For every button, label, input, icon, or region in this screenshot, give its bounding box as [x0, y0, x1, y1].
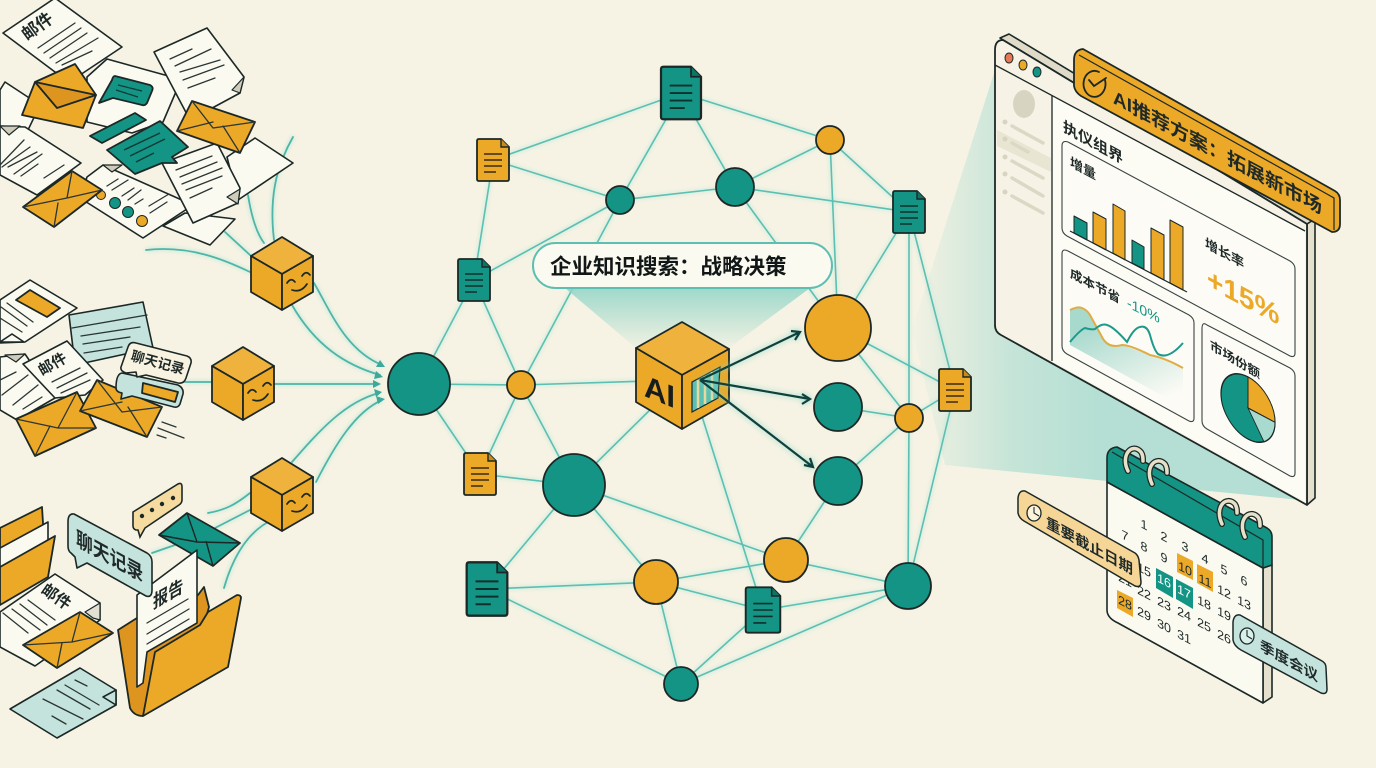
network nodes — [388, 126, 931, 701]
date numbers: 13 — [1237, 592, 1251, 613]
date numbers — [1118, 516, 1251, 647]
date numbers: 3 — [1182, 538, 1188, 556]
report paper: 报告 — [153, 575, 183, 613]
callout: search query: 企业知识搜索：战略决策 — [550, 255, 787, 279]
AI cube: AI — [644, 368, 675, 415]
date numbers: 9 — [1161, 549, 1167, 567]
label: important deadline — [1018, 491, 1141, 586]
middle-left document cluster — [0, 280, 191, 456]
label: quarterly meeting — [1233, 615, 1327, 694]
paper with title: mail — [0, 574, 100, 666]
paper: lines — [0, 354, 55, 420]
label: quarterly meeting: 季度会议 — [1260, 636, 1318, 686]
date numbers: 21 — [1118, 569, 1132, 590]
paper with title: mail: 邮件 — [36, 350, 70, 379]
date numbers: 1 — [1141, 516, 1147, 534]
icon: clock — [1027, 505, 1041, 521]
calendar body — [1107, 482, 1272, 703]
panel: cost savings: -10% — [1127, 296, 1160, 327]
calendar header — [1107, 447, 1272, 568]
paper with title: mail: 邮件 — [38, 581, 74, 614]
chat record label: 聊天记录 — [76, 527, 143, 587]
teal envelope — [159, 513, 240, 566]
icon: check — [1083, 71, 1106, 97]
knowledge network edges — [419, 93, 955, 684]
left folder — [0, 507, 55, 605]
label: important deadline: 重要截止日期 — [1046, 514, 1133, 579]
beam: AI to dashboard — [912, 70, 1300, 500]
dashboard window — [995, 34, 1315, 505]
flow arrowheads into main node — [373, 360, 385, 404]
panel: cost savings: 成本节省 — [1070, 265, 1120, 306]
sidebar — [997, 90, 1051, 213]
top-left document cluster — [0, 0, 293, 245]
date numbers: 8 — [1141, 538, 1147, 556]
panel: growth: 增长率 — [1205, 235, 1244, 271]
banner: AI recommendation: AI推荐方案：拓展新市场 — [1113, 85, 1322, 219]
panel: growth: +15% — [1207, 263, 1279, 332]
orange envelope 1 — [22, 64, 96, 128]
list paper with dots — [80, 165, 193, 238]
date numbers: 25 — [1197, 614, 1211, 635]
date numbers: 26 — [1217, 626, 1231, 647]
left paper — [0, 126, 81, 195]
paper right — [154, 28, 244, 120]
date numbers: 2 — [1161, 528, 1167, 546]
chat record bubble — [121, 342, 191, 383]
AI cube — [636, 322, 729, 429]
panel: growth — [1062, 142, 1295, 357]
date numbers: 30 — [1157, 615, 1171, 636]
window frame — [995, 34, 1315, 505]
date numbers: 19 — [1217, 603, 1231, 624]
calendar — [1107, 447, 1272, 703]
arrows from AI cube to results — [700, 331, 813, 467]
paper with title: mail — [23, 341, 103, 398]
motion dashes — [157, 422, 184, 438]
date numbers: 4 — [1202, 550, 1209, 568]
date numbers: 15 — [1137, 559, 1151, 580]
chat record label — [68, 514, 152, 596]
date numbers: 11 — [1199, 570, 1211, 591]
date numbers: 5 — [1221, 561, 1227, 579]
date numbers: 18 — [1197, 592, 1211, 613]
date numbers: 16 — [1157, 570, 1171, 591]
callout: search query — [533, 243, 832, 288]
orange envelope — [23, 612, 113, 668]
paper with title: mail: 邮件 — [18, 9, 57, 44]
orange envelope 2 — [177, 101, 255, 153]
dashboard title: 执仪组界 — [1063, 117, 1123, 168]
cube: middle source — [212, 347, 274, 420]
date numbers: 6 — [1241, 572, 1247, 590]
teal paper — [10, 668, 116, 738]
data flow curves into cubes — [146, 137, 382, 588]
date numbers: 12 — [1217, 581, 1231, 602]
report paper — [137, 550, 197, 687]
teal card — [69, 302, 153, 365]
panel: cost savings — [1062, 250, 1194, 422]
network document icons — [458, 67, 971, 633]
icon: clock — [1240, 628, 1254, 644]
date numbers: 22 — [1137, 582, 1151, 603]
panel: market share — [1202, 324, 1295, 477]
dotted speech bubble — [133, 483, 182, 537]
date numbers: 28 — [1118, 592, 1132, 613]
line chart — [1070, 307, 1183, 407]
chat record bubble: 聊天记录 — [129, 348, 186, 377]
date highlights — [1117, 553, 1213, 617]
teal chat bubbles — [90, 76, 188, 174]
date numbers: 17 — [1177, 581, 1191, 602]
orange envelope 3 — [23, 171, 102, 227]
date numbers: 23 — [1157, 593, 1171, 614]
orange envelopes — [16, 380, 162, 456]
teal bubble with orange bar — [116, 373, 183, 407]
panel: growth: 增量 — [1070, 154, 1096, 183]
AI cube window — [692, 367, 720, 412]
date numbers: 7 — [1122, 527, 1128, 545]
cube: top source — [251, 237, 313, 310]
bar chart — [1070, 204, 1187, 292]
panel: market share: 市场份额 — [1210, 337, 1260, 382]
date numbers: 31 — [1177, 626, 1191, 647]
orange folder with report — [118, 550, 241, 716]
date numbers: 24 — [1177, 603, 1191, 625]
bottom-left document cluster — [0, 483, 241, 738]
paper with title: mail — [3, 0, 122, 75]
paper with orange block — [0, 280, 77, 343]
calendar rings — [1125, 448, 1260, 537]
window buttons — [1005, 53, 1041, 77]
date numbers: 10 — [1178, 558, 1192, 579]
pie chart — [1221, 363, 1275, 453]
lower paper — [162, 143, 240, 223]
beam: callout to AI cube — [565, 288, 810, 348]
banner: AI recommendation — [1074, 49, 1340, 232]
date numbers: 29 — [1137, 603, 1151, 624]
cube: bottom source — [251, 458, 313, 531]
